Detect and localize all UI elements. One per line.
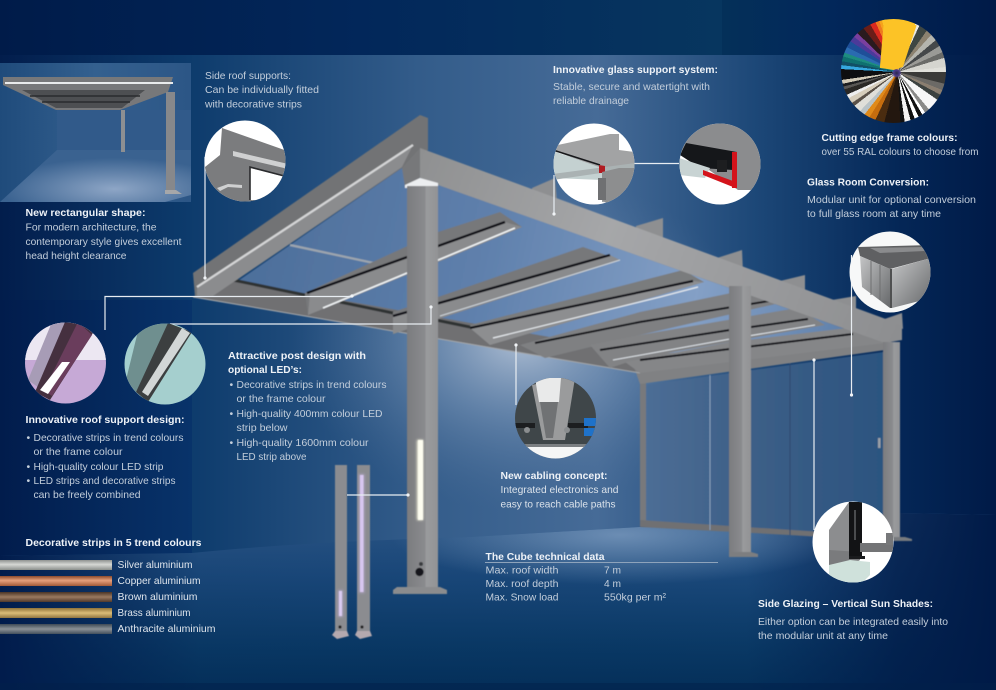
front beam bbox=[420, 148, 902, 343]
text: frame colours: over 55 RAL colours to choose from bbox=[822, 146, 979, 158]
small post illustration bbox=[332, 465, 372, 639]
text: side roof supports: with decorative strips bbox=[204, 98, 302, 110]
text: side glazing bbox=[758, 598, 948, 642]
text: glass support system: Stable, secure and watertight with bbox=[553, 81, 710, 93]
text: attractive post design: Decorative strips in trend colours bbox=[236, 379, 386, 391]
detail circle: purple roof support bbox=[25, 322, 107, 404]
text: glass support system: Innovative glass support system: bbox=[553, 64, 718, 76]
colour strips legend bbox=[0, 537, 216, 635]
detail circle: cabling bbox=[515, 378, 597, 460]
text: side roof supports: Can be individually fitted bbox=[205, 84, 319, 96]
text: cabling concept: Integrated electronics and bbox=[500, 484, 619, 496]
pergola structure bbox=[193, 115, 912, 594]
roof rafters bbox=[290, 212, 885, 373]
text: innovative roof support design: can be freely combined bbox=[34, 489, 141, 501]
text: cabling concept bbox=[500, 470, 619, 510]
colour strips legend: Brass aluminium bbox=[118, 607, 191, 619]
text: innovative roof support design: or the frame colour bbox=[34, 446, 123, 458]
text: side glazing: Either option can be integrated easily into bbox=[758, 616, 948, 628]
text: attractive post design: High-quality 400mm colour LED bbox=[236, 408, 383, 420]
detail circle: side roof support bbox=[204, 120, 286, 202]
technical data table: Max. roof depth bbox=[486, 578, 559, 590]
text: new rectangular shape: New rectangular shape: bbox=[26, 207, 146, 219]
end post bbox=[883, 342, 912, 541]
callout dots bbox=[203, 212, 853, 497]
text: side roof supports: Side roof supports: bbox=[205, 70, 291, 82]
colour strips legend: Decorative strips in 5 trend colours bbox=[26, 537, 202, 549]
detail circle: glass support bbox=[553, 123, 635, 205]
technical data table: 4 m bbox=[604, 578, 621, 590]
text: glass room conversion: to full glass room at any time bbox=[807, 208, 941, 220]
front post with LED bbox=[393, 148, 447, 594]
detail circle: glass room bbox=[849, 231, 931, 313]
text: attractive post design bbox=[228, 350, 386, 463]
text: side glazing: the modular unit at any time bbox=[758, 630, 888, 642]
text: innovative roof support design: Decorative strips in trend colours bbox=[34, 432, 184, 444]
text: innovative roof support design: • bbox=[26, 475, 30, 487]
text: innovative roof support design: • bbox=[26, 432, 30, 444]
detail circle: teal roof support bbox=[124, 323, 206, 405]
text: new rectangular shape: contemporary style gives excellent bbox=[26, 236, 182, 248]
text: attractive post design: • bbox=[230, 437, 234, 449]
icon: RAL colour wheel bbox=[841, 19, 946, 123]
text: frame colours bbox=[822, 132, 979, 158]
glass doors at rear bbox=[640, 352, 883, 540]
text: cabling concept: easy to reach cable paths bbox=[500, 498, 616, 510]
technical data table: 7 m bbox=[604, 564, 621, 576]
text: attractive post design: • bbox=[230, 379, 234, 391]
technical data table bbox=[485, 551, 718, 604]
text: innovative roof support design: LED strips and decorative strips bbox=[34, 475, 176, 487]
text: side glazing: Side Glazing – Vertical Sun Shades: bbox=[758, 598, 933, 610]
text: glass room conversion: Glass Room Conversion: bbox=[807, 176, 929, 188]
text: glass support system bbox=[553, 64, 718, 107]
text: side roof supports bbox=[204, 70, 319, 110]
detail circle: red gasket profile bbox=[679, 123, 765, 205]
technical data table: The Cube technical data bbox=[486, 551, 605, 563]
colour strips legend: Anthracite aluminium bbox=[118, 623, 216, 635]
roof underside with panes bbox=[222, 168, 885, 360]
technical data table: 550kg per m² bbox=[604, 592, 666, 604]
yellow colour card bbox=[880, 20, 917, 70]
text: glass support system: reliable drainage bbox=[553, 95, 629, 107]
text: glass room conversion: Modular unit for optional conversion bbox=[807, 194, 976, 206]
colour strips legend: Copper aluminium bbox=[118, 575, 201, 587]
text: frame colours: Cutting edge frame colours: bbox=[822, 132, 958, 144]
text: attractive post design: LED strip above bbox=[236, 451, 307, 463]
text: attractive post design: optional LED’s: bbox=[228, 364, 302, 376]
detail circle: side glazing bbox=[812, 501, 894, 585]
technical data table: Max. Snow load bbox=[486, 592, 559, 604]
text: attractive post design: High-quality 1600mm colour bbox=[236, 437, 369, 449]
text: attractive post design: Attractive post design with bbox=[228, 350, 366, 362]
middle post bbox=[729, 286, 758, 557]
text: attractive post design: or the frame colour bbox=[236, 393, 326, 405]
rear and side lower beams bbox=[193, 280, 885, 384]
text: innovative roof support design: High-quality colour LED strip bbox=[34, 461, 164, 473]
rafter ends above front beam bbox=[532, 178, 903, 329]
text: cabling concept: New cabling concept: bbox=[500, 470, 608, 482]
text: new rectangular shape: For modern architecture, the bbox=[26, 222, 157, 234]
text: glass room conversion bbox=[807, 176, 976, 220]
text: attractive post design: • bbox=[230, 408, 234, 420]
colour strips legend: Silver aluminium bbox=[118, 559, 193, 571]
text: new rectangular shape bbox=[26, 207, 182, 262]
photo: rectangular shape bbox=[0, 63, 191, 202]
text: new rectangular shape: head height clearance bbox=[26, 250, 127, 262]
technical data table: Max. roof width bbox=[486, 564, 559, 576]
side beam bbox=[193, 115, 428, 297]
text: innovative roof support design: Innovative roof support design: bbox=[26, 414, 184, 426]
text: innovative roof support design: • bbox=[26, 461, 30, 473]
colour strips legend: Brown aluminium bbox=[118, 591, 198, 603]
text: innovative roof support design bbox=[26, 414, 184, 501]
callout lines bbox=[105, 157, 852, 530]
text: attractive post design: strip below bbox=[236, 422, 288, 434]
